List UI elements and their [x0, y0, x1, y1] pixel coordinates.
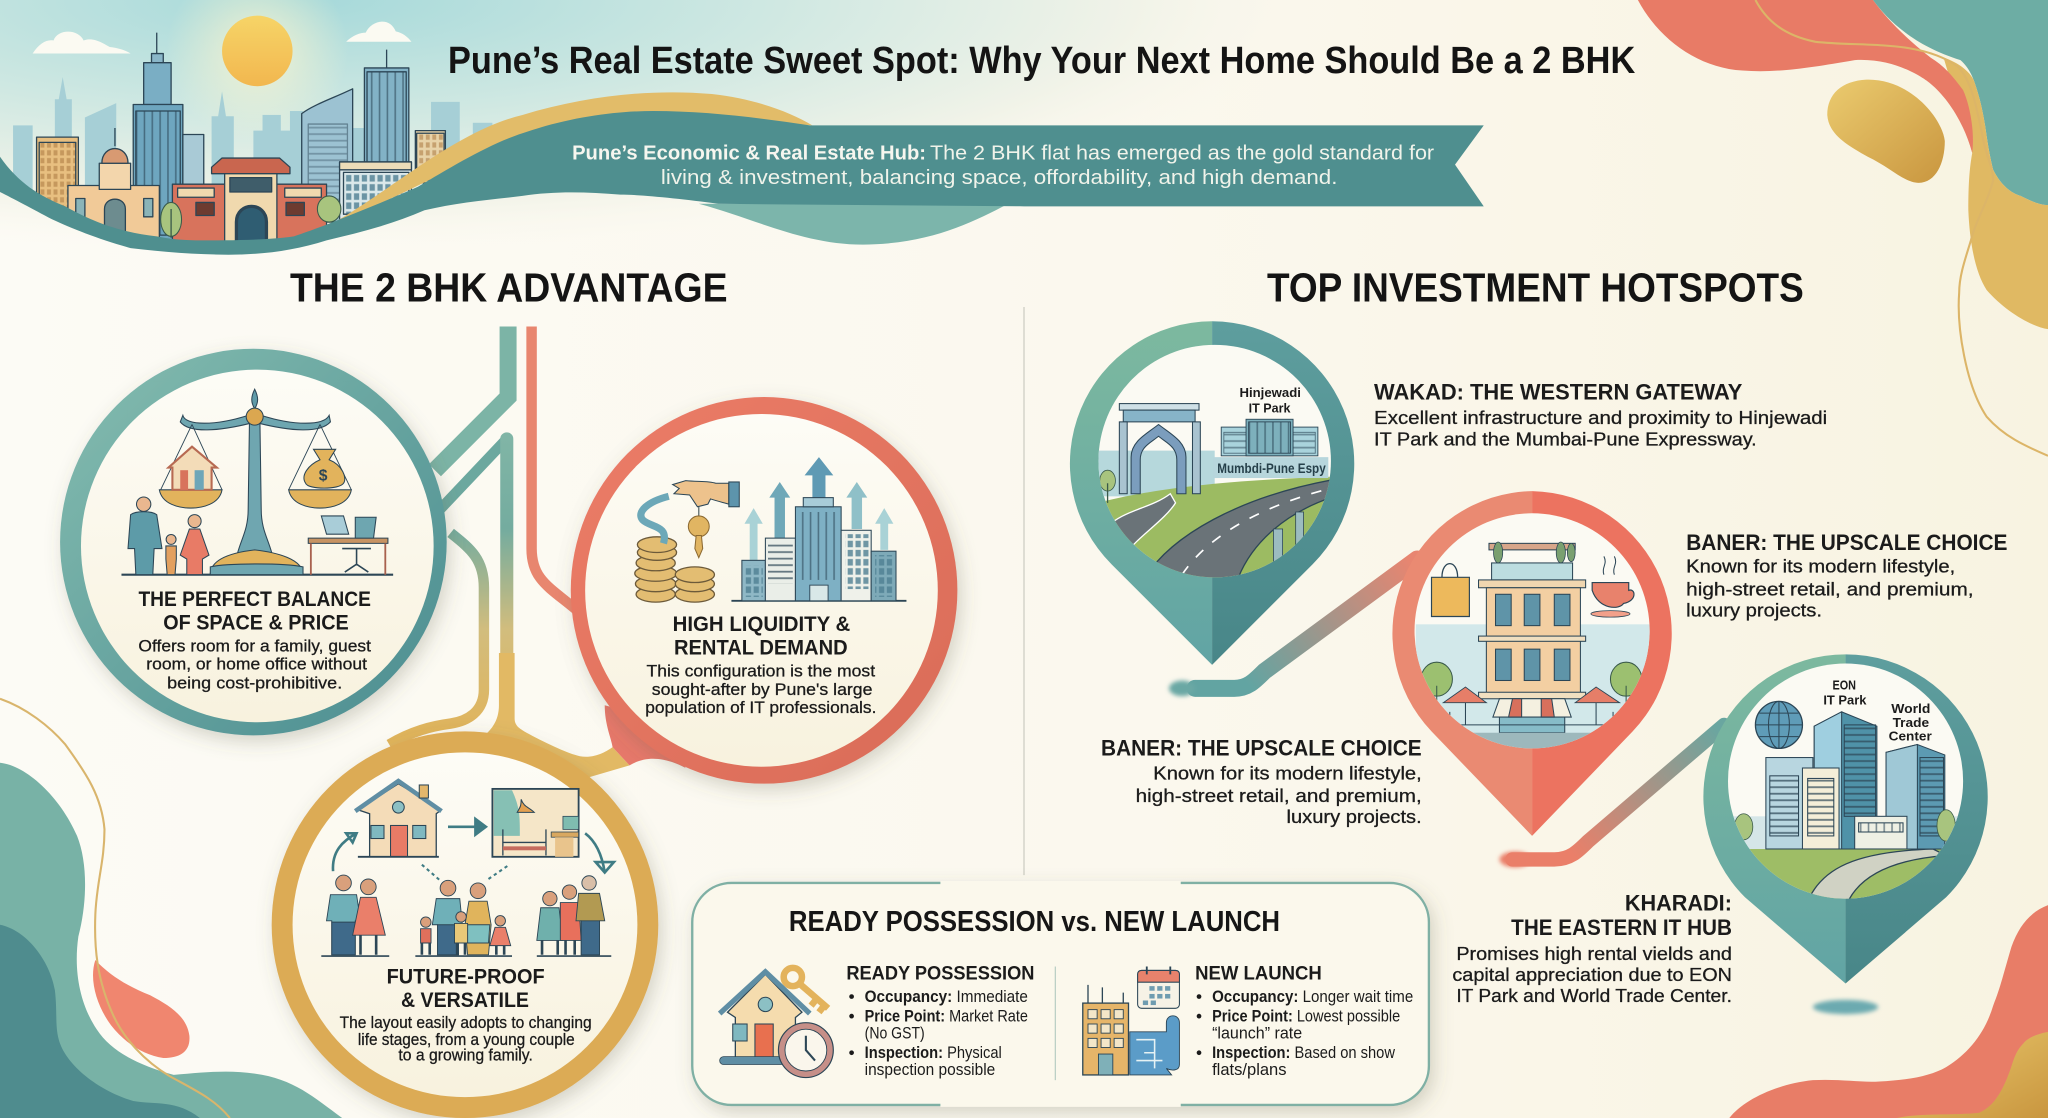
- scene labels: Mumbdi-Pune Espy: [1217, 461, 1326, 476]
- tall tower: [133, 33, 183, 242]
- scene labels: Hinjewadi: [1240, 385, 1301, 400]
- text: Baner right: BANER: THE UPSCALE CHOICE: [1686, 530, 2008, 555]
- panel: Kharadi pin: [1703, 654, 1988, 984]
- text: Baner left: [1101, 736, 1422, 827]
- decor: bottom-left blobs: [0, 699, 342, 1118]
- decor: top-right blobs: [1638, 0, 2048, 456]
- text: perfect balance: room, or home office without: [146, 654, 367, 673]
- text: Kharadi: IT Park and World Trade Center.: [1456, 985, 1732, 1006]
- text: Kharadi: [1452, 890, 1732, 1006]
- text: future-proof: The layout easily adopts to changing: [340, 1014, 592, 1032]
- text: Kharadi: capital appreciation due to EON: [1452, 964, 1732, 985]
- header skyline illustration: [13, 33, 492, 251]
- text: Baner left: high-street retail, and premium,: [1136, 785, 1422, 806]
- icon: scales with family and desk: [121, 389, 393, 575]
- text: high liquidity: This configuration is the most: [647, 662, 875, 681]
- clouds: [33, 22, 411, 54]
- text: high liquidity: [645, 611, 876, 717]
- column: new launch: NEW LAUNCH: [1195, 963, 1322, 985]
- text: Baner left: Known for its modern lifestyle,: [1153, 763, 1422, 784]
- pin shape: [1703, 654, 1988, 984]
- header ribbon: gold wave: [337, 92, 812, 221]
- sun: [222, 16, 293, 86]
- scene labels: Trade: [1893, 715, 1929, 730]
- sky wash: [0, 0, 1567, 248]
- column: ready possession: Occupancy: Immediate: [865, 988, 1028, 1006]
- connectors between advantage circles: [389, 327, 686, 797]
- column: new launch: “launch” rate: [1212, 1024, 1302, 1042]
- scene labels: [1823, 678, 1932, 744]
- pin shape: [1392, 491, 1672, 836]
- text: future-proof: life stages, from a young couple: [358, 1031, 575, 1049]
- icon: coins, key and buildings: [635, 457, 906, 602]
- scene labels: Center: [1889, 729, 1932, 744]
- panel: perfect balance circle: [60, 349, 447, 735]
- banner text: [572, 142, 1434, 189]
- column: ready possession: (No GST): [865, 1024, 925, 1042]
- text: Baner left: BANER: THE UPSCALE CHOICE: [1101, 736, 1422, 761]
- scene: gateway and expressway: [1097, 404, 1335, 581]
- pin shape: [1070, 321, 1354, 665]
- comparison heading: READY POSSESSION vs. NEW LAUNCH: [789, 906, 1280, 938]
- text: Baner right: luxury projects.: [1686, 599, 1822, 620]
- text: Wakad: Excellent infrastructure and proximity to Hinjewadi: [1374, 407, 1827, 428]
- text: Baner right: [1686, 530, 2008, 620]
- scene labels: IT Park: [1249, 401, 1291, 416]
- panel: high liquidity circle: [571, 397, 957, 784]
- panel: future-proof circle: [272, 731, 658, 1118]
- text: Baner right: high-street retail, and premium,: [1686, 579, 1974, 600]
- text: future-proof: to a growing family.: [398, 1047, 533, 1065]
- people: young couple: [327, 875, 385, 955]
- text: Baner right: Known for its modern lifestyle,: [1686, 556, 1955, 577]
- text: high liquidity: sought-after by Pune's large: [652, 680, 872, 699]
- scene: upscale building: [1416, 542, 1651, 751]
- banner text: living & investment, balancing space, offordability, and high demand.: [661, 167, 1337, 189]
- text: Wakad: [1374, 380, 1827, 449]
- header ribbon banner: [0, 111, 1484, 255]
- panel: Wakad pin: [1070, 321, 1827, 665]
- column: ready possession: inspection possible: [865, 1061, 995, 1079]
- text: high liquidity: population of IT professionals.: [645, 698, 876, 717]
- text: perfect balance: Offers room for a family, guest: [138, 637, 371, 656]
- icon: building, calendar and blueprint: [1083, 967, 1179, 1075]
- text: Baner left: luxury projects.: [1287, 806, 1422, 827]
- scene labels: [1217, 385, 1326, 476]
- section heading: advantage: THE 2 BHK ADVANTAGE: [290, 265, 728, 311]
- text: Wakad: IT Park and the Mumbai-Pune Expressway.: [1374, 428, 1757, 449]
- banner text: Pune’s Economic & Real Estate Hub:: [572, 142, 926, 164]
- column: new launch: [1195, 963, 1413, 1079]
- column: new launch: flats/plans: [1212, 1061, 1287, 1079]
- scene: IT park: [1728, 701, 1963, 901]
- icon: life stages: [321, 781, 614, 956]
- text: Kharadi: KHARADI:: [1625, 890, 1732, 915]
- column: ready possession: Inspection: Physical: [865, 1044, 1002, 1062]
- main title: Pune’s Real Estate Sweet Spot: Why Your Next Home Should Be a 2 BHK: [448, 40, 1635, 82]
- text: perfect balance: [138, 586, 371, 692]
- pin shadow: Kharadi: [1813, 1000, 1878, 1014]
- trees: [161, 196, 341, 238]
- column: ready possession: [846, 963, 1034, 1079]
- text: future-proof: [340, 964, 592, 1065]
- pin shadow: Baner: [1499, 852, 1531, 867]
- red heritage gate: [172, 158, 327, 251]
- text: future-proof: & VERSATILE: [401, 987, 529, 1012]
- scene labels: World: [1891, 701, 1930, 716]
- decor: bottom-right blobs: [1729, 905, 2048, 1118]
- decor: gold blob: [1827, 80, 1945, 183]
- back towers: [13, 78, 492, 190]
- panel: ready possession vs new launch: [692, 883, 1429, 1105]
- glass buildings: [183, 50, 445, 222]
- people: growing family: [421, 880, 511, 955]
- people: elders: [537, 876, 605, 955]
- pin shadow: Wakad: [1169, 680, 1195, 696]
- scene labels: EON: [1832, 678, 1856, 693]
- column: new launch: Inspection: Based on show: [1212, 1044, 1395, 1062]
- text: high liquidity: RENTAL DEMAND: [674, 634, 848, 659]
- left tan building and dome: [37, 128, 159, 244]
- text: perfect balance: THE PERFECT BALANCE: [138, 586, 371, 611]
- icon: scales with family and desk: $: [319, 468, 328, 485]
- panel: Baner pin: [1392, 491, 2008, 836]
- text: future-proof: FUTURE-PROOF: [387, 964, 545, 989]
- scene labels: IT Park: [1823, 693, 1867, 708]
- sun glow: [166, 0, 349, 142]
- section heading: hotspots: TOP INVESTMENT HOTSPOTS: [1267, 265, 1804, 311]
- banner text: The 2 BHK flat has emerged as the gold standard for: [930, 142, 1434, 164]
- column: new launch: Price Point: Lowest possible: [1212, 1007, 1400, 1025]
- connector: Baner to Kharadi: [1512, 725, 1724, 859]
- text: perfect balance: being cost-prohibitive.: [167, 673, 342, 692]
- column: ready possession: READY POSSESSION: [846, 963, 1034, 985]
- column: ready possession: Price Point: Market Rate: [865, 1007, 1028, 1025]
- text: perfect balance: OF SPACE & PRICE: [163, 610, 349, 635]
- text: Wakad: WAKAD: THE WESTERN GATEWAY: [1374, 380, 1743, 405]
- text: Kharadi: Promises high rental vields and: [1456, 943, 1732, 964]
- icon: house, key and clock: [720, 968, 833, 1078]
- header ribbon tail: [699, 204, 1008, 245]
- connector: Wakad to Baner: [1195, 559, 1417, 688]
- column: new launch: Occupancy: Longer wait time: [1212, 988, 1413, 1006]
- text: high liquidity: HIGH LIQUIDITY &: [673, 611, 850, 636]
- text: Kharadi: THE EASTERN IT HUB: [1511, 915, 1732, 940]
